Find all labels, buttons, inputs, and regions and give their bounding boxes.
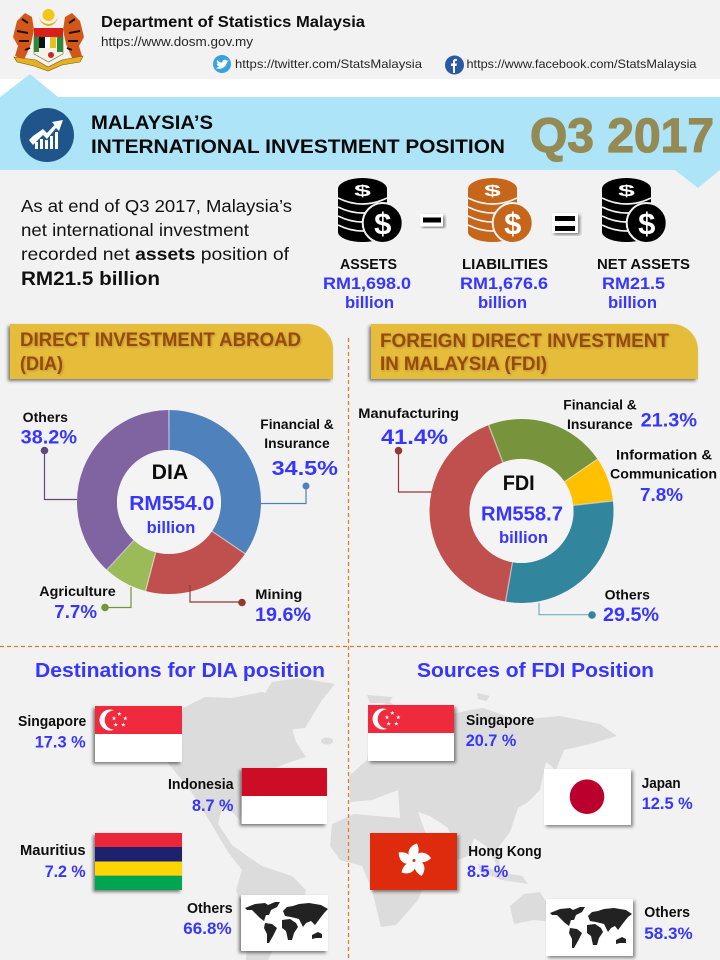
title	[91, 113, 505, 158]
assets value	[323, 256, 411, 312]
background world map	[130, 678, 617, 960]
header: organisation name: Department of Statistics Malaysia	[101, 14, 365, 31]
destination: Singapore: 17.3 %	[35, 732, 86, 752]
header: website: https://www.dosm.gov.my	[101, 35, 254, 49]
callout: mining: 19.6%	[255, 605, 311, 626]
destination: Others	[183, 895, 328, 951]
donut chart: FDI	[428, 418, 615, 604]
source: Others	[546, 899, 693, 956]
callout: FDI financial and insurance	[563, 396, 697, 432]
callout: agriculture: 7.7%	[54, 602, 97, 622]
callout: FDI financial and insurance: Financial &	[563, 396, 637, 412]
donut centre: DIA total: DIA	[152, 461, 188, 484]
callout: financial and insurance: 34.5%	[272, 458, 338, 480]
period label: Q3 2017	[530, 110, 714, 163]
summary text: As at end of Q3 2017, Malaysia’s	[21, 196, 292, 216]
callout: mining	[190, 585, 311, 626]
summary text	[21, 196, 292, 290]
assets value: billion	[345, 293, 394, 312]
callout: information and communication: Information &	[616, 446, 712, 462]
callout: information and communication: Communication	[610, 466, 717, 482]
liabilities value: RM1,676.6	[460, 274, 548, 293]
source: Others: 58.3%	[644, 924, 693, 943]
destination: Indonesia: 8.7 %	[192, 796, 234, 815]
donut centre: DIA total	[117, 450, 221, 554]
callout: manufacturing: Manufacturing	[358, 405, 459, 421]
callout: agriculture: Agriculture	[39, 583, 116, 599]
donut centre: FDI total: FDI	[503, 472, 535, 495]
icon: assets coins: $	[354, 182, 372, 200]
icon: net assets coins	[602, 178, 667, 243]
source: Hong Kong: Hong Kong	[468, 844, 542, 860]
summary text: recorded net assets position of	[21, 244, 289, 264]
donut centre: FDI total	[470, 459, 574, 563]
panel heading: DIA: (DIA)	[20, 353, 63, 375]
icon: liabilities coins: $	[484, 182, 502, 200]
liabilities value: LIABILITIES	[462, 256, 548, 273]
panel heading: FDI	[371, 324, 698, 379]
source: Singapore	[368, 705, 534, 761]
heading: sources: Sources of FDI Position	[417, 660, 654, 682]
facebook url: https://www.facebook.com/StatsMalaysia	[466, 57, 697, 71]
destination: Mauritius	[20, 833, 182, 890]
callout: information and communication	[610, 446, 717, 505]
donut centre: FDI total: RM558.7	[481, 504, 563, 526]
icon: assets coins: $	[374, 206, 391, 241]
source: Others: Others	[644, 905, 690, 921]
heading: destinations: Destinations for DIA position	[35, 660, 325, 682]
icon: net assets coins: $	[618, 182, 636, 200]
title: MALAYSIA’S	[91, 113, 213, 134]
icon: liabilities coins	[468, 178, 533, 243]
destination: Indonesia: Indonesia	[168, 777, 234, 793]
panel heading: DIA	[10, 324, 333, 379]
callout: others	[21, 409, 77, 500]
callout: information and communication: 7.8%	[640, 485, 683, 505]
net assets value: RM21.5	[602, 274, 665, 293]
icon: liabilities coins: $	[504, 206, 521, 241]
assets value: RM1,698.0	[323, 274, 411, 293]
destination: Indonesia	[168, 768, 327, 824]
liabilities value	[460, 256, 548, 312]
donut chart: DIA	[97, 430, 241, 574]
icon: twitter	[213, 55, 231, 73]
destination: Singapore: Singapore	[18, 714, 86, 730]
callout: others: 38.2%	[21, 428, 77, 448]
icon: facebook	[445, 56, 464, 74]
panel heading: FDI: IN MALAYSIA (FDI)	[380, 353, 547, 375]
source: Singapore: Singapore	[466, 713, 534, 729]
source: Japan: Japan	[642, 776, 681, 792]
source: Hong Kong	[370, 833, 542, 890]
callout: FDI others	[539, 586, 659, 626]
donut centre: FDI total: billion	[499, 529, 548, 547]
donut centre: DIA total: billion	[147, 519, 195, 537]
callout: mining: Mining	[255, 586, 302, 602]
donut centre: DIA total: RM554.0	[129, 493, 214, 515]
callout: manufacturing	[358, 405, 459, 492]
callout: FDI financial and insurance: Insurance	[567, 416, 633, 432]
callout: financial and insurance	[260, 416, 338, 504]
icon: equals	[552, 213, 578, 233]
net assets value: NET ASSETS	[597, 256, 690, 273]
assets value: ASSETS	[340, 256, 397, 273]
destination: Mauritius: Mauritius	[20, 843, 86, 859]
twitter url: https://twitter.com/StatsMalaysia	[235, 57, 422, 71]
panel heading: FDI: FOREIGN DIRECT INVESTMENT	[380, 330, 669, 352]
summary text: net international investment	[21, 220, 249, 240]
source: Japan	[544, 769, 693, 825]
icon: assets coins	[338, 178, 403, 243]
callout: manufacturing: 41.4%	[381, 426, 448, 449]
title banner	[0, 74, 720, 188]
source: Japan: 12.5 %	[642, 794, 693, 813]
header: coat of arms	[13, 9, 84, 71]
icon: minus	[420, 214, 443, 226]
title: INTERNATIONAL INVESTMENT POSITION	[91, 137, 505, 158]
icon: rising chart	[20, 108, 74, 162]
callout: FDI others: Others	[605, 586, 650, 602]
callout: FDI others: 29.5%	[603, 605, 659, 626]
destination: Others: Others	[187, 901, 233, 917]
source: Hong Kong: 8.5 %	[467, 862, 508, 881]
net assets value: billion	[608, 293, 657, 312]
destination: Singapore	[18, 706, 182, 762]
destination: Others: 66.8%	[183, 919, 232, 938]
source: Singapore: 20.7 %	[466, 731, 516, 750]
net assets value	[597, 256, 690, 312]
summary text: RM21.5 billion	[21, 268, 160, 290]
callout: others: Others	[23, 409, 68, 425]
icon: net assets coins: $	[638, 206, 655, 241]
callout: FDI financial and insurance: 21.3%	[641, 410, 697, 432]
callout: financial and insurance: Insurance	[264, 435, 330, 451]
destination: Mauritius: 7.2 %	[45, 862, 86, 881]
panel heading: DIA: DIRECT INVESTMENT ABROAD	[20, 329, 301, 351]
callout: agriculture	[39, 583, 131, 622]
callout: financial and insurance: Financial &	[260, 416, 334, 432]
liabilities value: billion	[478, 293, 527, 312]
